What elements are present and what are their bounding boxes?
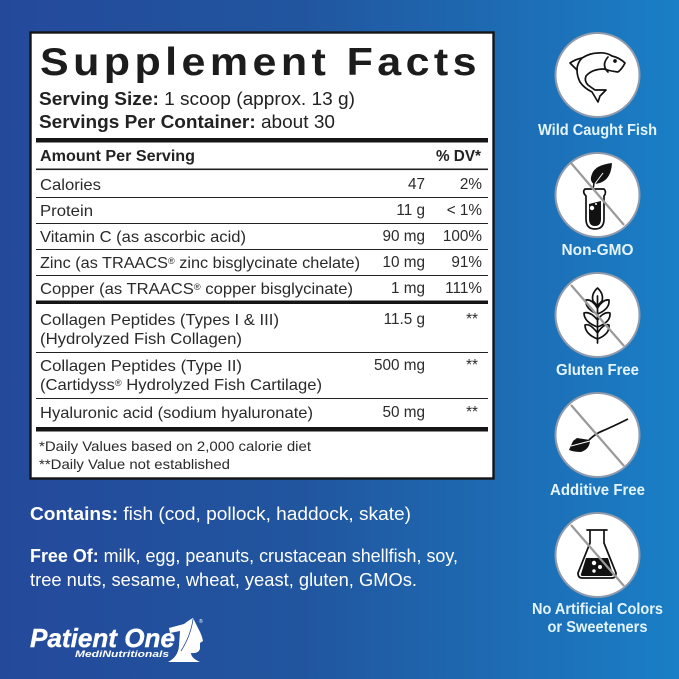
row: calories bbox=[40, 176, 482, 194]
row: collagen peptides type ii bbox=[40, 357, 478, 394]
label: Non-GMO bbox=[562, 242, 634, 259]
row: collagen peptides types i and iii: ** bbox=[466, 311, 478, 328]
row: zinc bbox=[40, 254, 482, 272]
servings per container: Servings Per Container: about 30 bbox=[39, 112, 335, 132]
row: collagen peptides types i and iii: 11.5 g bbox=[384, 311, 425, 328]
footnotes: *Daily Values based on 2,000 calorie diet bbox=[39, 438, 311, 454]
row: hyaluronic acid: ** bbox=[466, 404, 478, 421]
icon: test tube with leaf bbox=[584, 163, 612, 229]
row: protein: Protein bbox=[40, 203, 93, 220]
row: copper: ® bbox=[194, 282, 201, 292]
contains statement: Contains: fish (cod, pollock, haddock, skate) bbox=[30, 504, 411, 524]
row: collagen peptides type ii: ** bbox=[466, 357, 478, 374]
row: vitamin c: Vitamin C (as ascorbic acid) bbox=[40, 229, 246, 246]
row: vitamin c bbox=[40, 228, 482, 246]
footnotes: **Daily Value not established bbox=[39, 456, 230, 472]
free of statement: tree nuts, sesame, wheat, yeast, gluten, GMOs. bbox=[30, 570, 417, 590]
badge: wild caught fish bbox=[538, 33, 657, 139]
row: copper: Copper (as TRAACS bbox=[40, 281, 188, 298]
table header bbox=[40, 148, 481, 165]
icon: wheat bbox=[584, 288, 610, 343]
footnotes bbox=[39, 438, 311, 472]
row: collagen peptides types i and iii: Collagen Peptides (Types I & III) bbox=[40, 312, 279, 329]
row: copper: 111% bbox=[445, 280, 482, 297]
logo: patient one: MediNutritionals bbox=[75, 649, 169, 660]
label: Wild Caught Fish bbox=[538, 122, 657, 139]
badge: no artificial colors or sweeteners bbox=[532, 513, 663, 636]
logo: patient one: ® bbox=[199, 618, 203, 625]
row: vitamin c: 100% bbox=[443, 228, 482, 245]
label: No Artificial Colors bbox=[532, 601, 663, 618]
row: zinc: ® bbox=[168, 256, 175, 266]
row: copper: copper bisglycinate) bbox=[201, 281, 353, 298]
row: protein: 11 g bbox=[396, 202, 425, 219]
row: zinc: zinc bisglycinate chelate) bbox=[175, 255, 360, 272]
icon: fish bbox=[570, 53, 625, 102]
row: collagen peptides type ii: 500 mg bbox=[374, 357, 425, 374]
logo: patient one bbox=[30, 618, 203, 662]
row: zinc: Zinc (as TRAACS bbox=[40, 255, 166, 272]
row: protein: < 1% bbox=[447, 202, 482, 219]
logo: patient one: Patient One bbox=[30, 623, 175, 653]
row: hyaluronic acid: Hyaluronic acid (sodium hyaluronate) bbox=[40, 405, 313, 422]
row: vitamin c: 90 mg bbox=[382, 228, 425, 245]
row: collagen peptides types i and iii bbox=[40, 311, 478, 348]
free of statement bbox=[30, 546, 458, 590]
row: zinc: 91% bbox=[451, 254, 482, 271]
row: zinc: 10 mg bbox=[382, 254, 425, 271]
row: collagen peptides type ii: Collagen Peptides (Type II) bbox=[40, 358, 242, 375]
icon: flask bbox=[578, 530, 616, 578]
table header: % DV* bbox=[436, 148, 481, 165]
row: copper: 1 mg bbox=[391, 280, 425, 297]
row: collagen peptides type ii: Hydrolyzed Fish Cartilage) bbox=[122, 377, 322, 394]
row: copper bbox=[40, 280, 482, 298]
badge: non-gmo bbox=[556, 153, 640, 259]
icon: spoon bbox=[569, 419, 628, 452]
row: calories: Calories bbox=[40, 177, 101, 194]
heading: supplement facts: Supplement Facts bbox=[40, 41, 481, 84]
row: collagen peptides type ii: (Cartidyss bbox=[40, 377, 112, 394]
label: Additive Free bbox=[550, 482, 645, 499]
row: calories: 2% bbox=[460, 176, 482, 193]
row: hyaluronic acid bbox=[40, 404, 478, 422]
badge: gluten free bbox=[556, 273, 640, 379]
panel: supplement facts bbox=[30, 32, 494, 478]
row: collagen peptides type ii: ® bbox=[115, 378, 122, 388]
label bbox=[532, 601, 663, 636]
row: protein bbox=[40, 202, 482, 220]
serving size: Serving Size: 1 scoop (approx. 13 g) bbox=[39, 89, 355, 109]
label: or Sweeteners bbox=[548, 619, 648, 636]
label: Gluten Free bbox=[556, 362, 639, 379]
row: calories: 47 bbox=[408, 176, 425, 193]
row: hyaluronic acid: 50 mg bbox=[382, 404, 425, 421]
badge: additive free bbox=[550, 393, 645, 499]
table header: Amount Per Serving bbox=[40, 148, 195, 165]
free of statement: Free Of: milk, egg, peanuts, crustacean shellfish, soy, bbox=[30, 546, 458, 566]
row: collagen peptides types i and iii: (Hydrolyzed Fish Collagen) bbox=[40, 331, 242, 348]
